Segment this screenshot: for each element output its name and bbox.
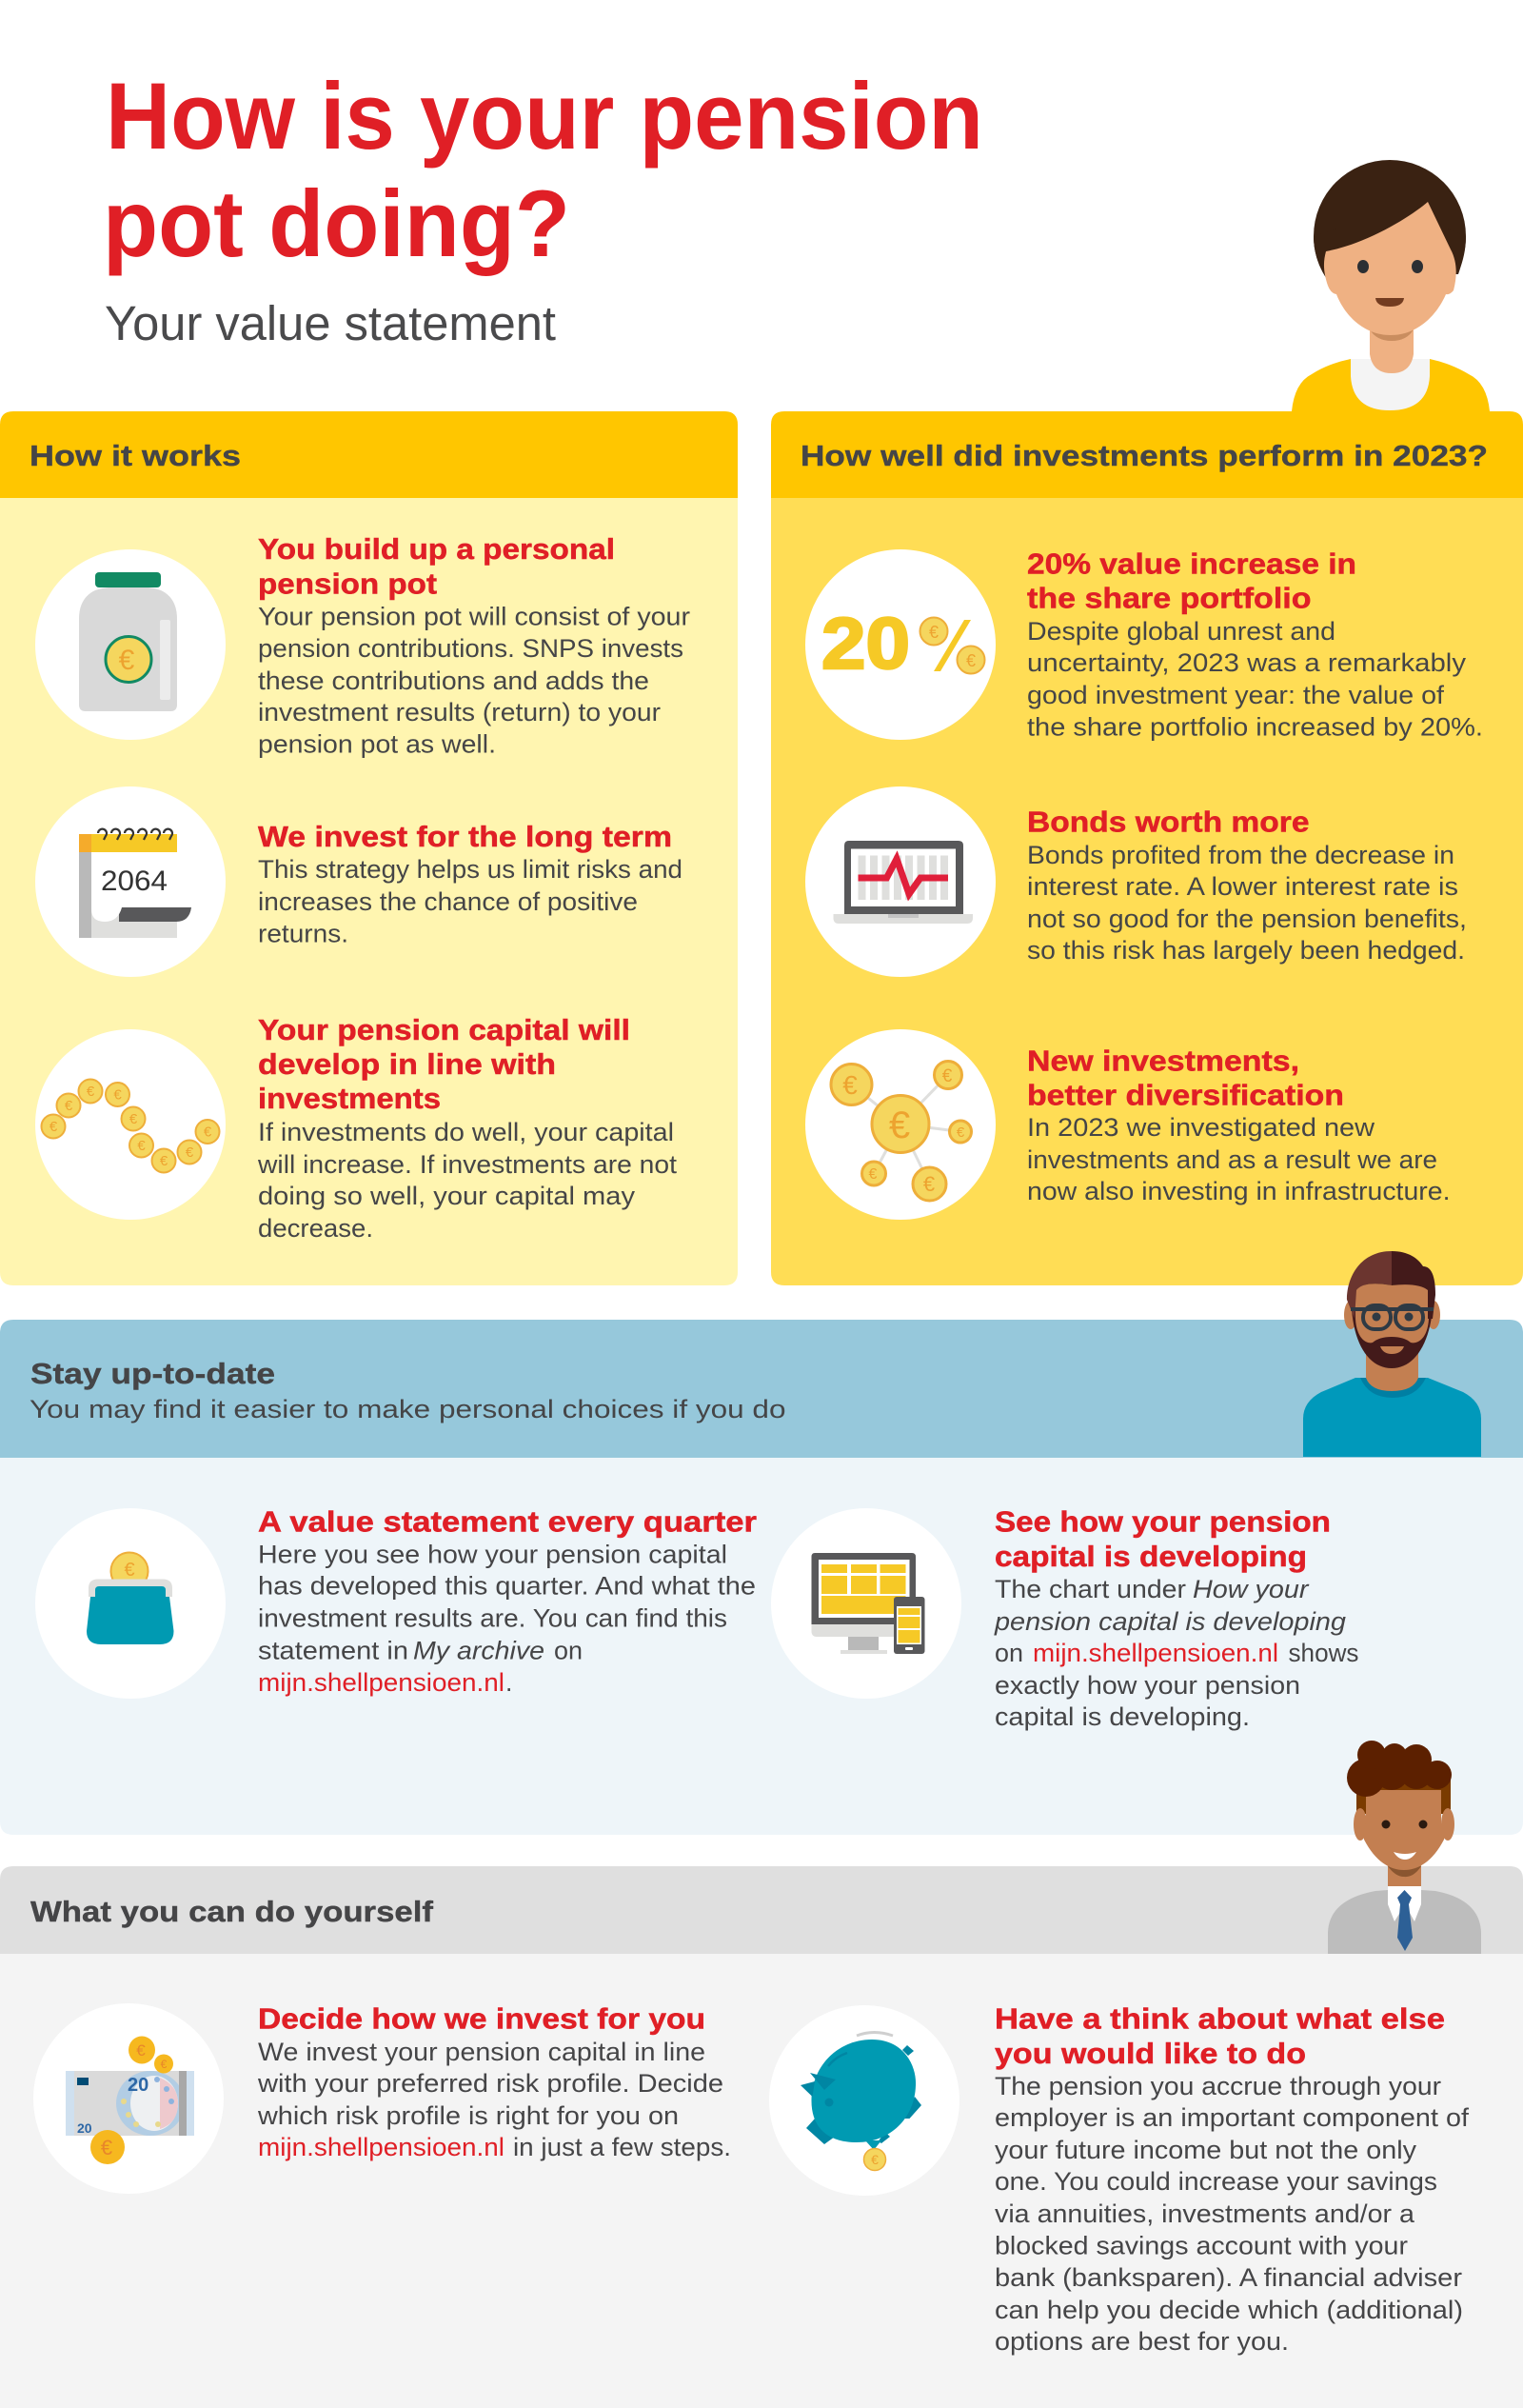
icon: banknote and coins: € xyxy=(136,2041,146,2060)
text block: value statement every quarter: statement in xyxy=(258,1636,408,1664)
panel: what you can do yourself xyxy=(0,1866,1523,2408)
text block: personal pension pot: Your pension pot will consist of your xyxy=(258,602,690,630)
icon: purse with coin: € xyxy=(124,1560,135,1581)
text block: what else to do: can help you decide which (additional) xyxy=(995,2296,1463,2324)
panel header: stay up-to-date xyxy=(0,1320,1523,1458)
text block: value statement every quarter xyxy=(258,1504,757,1697)
text block: value statement every quarter: investment results are. You can find this xyxy=(258,1603,727,1632)
text block: value statement every quarter: mijn.shellpensioen.nl xyxy=(258,1668,504,1697)
text block: bonds: Bonds worth more xyxy=(1027,806,1310,838)
text block: decide how we invest: which risk profile is right for you on xyxy=(257,2101,679,2130)
text block: personal pension pot: investment results (return) to your xyxy=(258,698,661,726)
text block: new investments xyxy=(1027,1044,1451,1205)
icon: coin network: € xyxy=(869,1166,878,1183)
text block: what else to do: bank (banksparen). A financial adviser xyxy=(995,2263,1462,2292)
icon: laptop with chart xyxy=(805,786,996,977)
text block: personal pension pot: these contributions and adds the xyxy=(258,667,649,695)
text block: personal pension pot: You build up a personal xyxy=(258,532,615,566)
panel header: what you can do yourself: What you can do yourself xyxy=(30,1895,434,1928)
icon: wave of coins: € xyxy=(87,1084,95,1100)
text block: value statement every quarter: Here you see how your pension capital xyxy=(258,1541,727,1569)
text block: new investments: investments and as a result we are xyxy=(1027,1145,1437,1174)
text block: see how your capital develops: mijn.shellpensioen.nl xyxy=(1033,1639,1278,1667)
text block: bonds: Bonds profited from the decrease in xyxy=(1027,841,1454,869)
text block: what else to do: employer is an important component of xyxy=(995,2103,1470,2132)
panel header: how it works: How it works xyxy=(30,439,241,472)
subtitle: Your value statement xyxy=(105,296,556,350)
icon: purse with coin xyxy=(35,1508,226,1699)
text block: share portfolio: uncertainty, 2023 was a remarkably xyxy=(1027,648,1467,677)
text block: see how your capital develops: How your xyxy=(1193,1575,1310,1603)
text block: long term: increases the chance of positive xyxy=(258,887,638,916)
icon: wave of coins: € xyxy=(129,1111,138,1127)
text block: long term: We invest for the long term xyxy=(258,820,672,853)
text block: see how your capital develops: capital is developing xyxy=(995,1540,1307,1573)
text block: what else to do: you would like to do xyxy=(995,2037,1306,2070)
icon: banknote and coins xyxy=(33,2003,224,2194)
panel header: investment performance: How well did investments perform in 2023? xyxy=(801,439,1488,472)
panel: stay up-to-date xyxy=(0,1320,1523,1835)
text block: value statement every quarter: A value statement every quarter xyxy=(258,1504,757,1539)
text block: decide how we invest: mijn.shellpensioen.nl xyxy=(258,2133,504,2161)
text block: new investments: better diversification xyxy=(1027,1078,1344,1112)
text block: what else to do: The pension you accrue through your xyxy=(995,2072,1441,2100)
text block: share portfolio: the share portfolio increased by 20%. xyxy=(1027,712,1483,741)
text block: what else to do: via annuities, investments and/or a xyxy=(995,2199,1414,2228)
text block: personal pension pot xyxy=(258,532,690,758)
illustration: man in grey suit xyxy=(1328,1741,1481,1954)
text block: what else to do xyxy=(995,2001,1470,2356)
icon: wave of coins: € xyxy=(113,1087,122,1103)
text block: personal pension pot: pension pot as well. xyxy=(258,729,496,758)
icon: coin network: € xyxy=(942,1066,953,1086)
text block: long term: returns. xyxy=(258,920,348,948)
icon: coin network: € xyxy=(842,1070,858,1100)
text block: value statement every quarter: My archive xyxy=(413,1636,544,1664)
text block: capital develops: Your pension capital will xyxy=(258,1013,630,1046)
text block: what else to do: Have a think about what else xyxy=(995,2001,1445,2036)
text block: capital develops: doing so well, your capital may xyxy=(258,1182,636,1210)
text block: capital develops: will increase. If investments are not xyxy=(257,1150,678,1179)
icon: wave of coins: € xyxy=(186,1144,194,1161)
icon: wave of coins: € xyxy=(49,1119,58,1135)
icon: 20 percent xyxy=(805,549,996,740)
icon: 20 percent: 20 xyxy=(821,604,910,685)
icon: coin network: € xyxy=(923,1172,935,1196)
text block: see how your capital develops xyxy=(994,1504,1359,1731)
text block: new investments: In 2023 we investigated new xyxy=(1027,1113,1375,1142)
icon: pension jar xyxy=(35,549,226,740)
icon: wave of coins: € xyxy=(65,1098,73,1114)
title xyxy=(103,63,983,276)
panel: investment performance xyxy=(771,411,1523,1285)
icon: calendar 2064 xyxy=(35,786,226,977)
text block: personal pension pot: pension pot xyxy=(258,567,437,600)
icon: 20 percent: € xyxy=(966,651,976,670)
panel header: what you can do yourself xyxy=(0,1866,1523,1954)
text block: share portfolio: 20% value increase in xyxy=(1027,547,1356,581)
illustration: man with glasses and beard xyxy=(1303,1251,1481,1457)
text block: personal pension pot: pension contributions. SNPS invests xyxy=(258,634,683,663)
text block: new investments: New investments, xyxy=(1027,1044,1299,1078)
text block: share portfolio: good investment year: the value of xyxy=(1027,681,1445,709)
text block: share portfolio: Despite global unrest and xyxy=(1027,617,1335,646)
text block: bonds: so this risk has largely been hedged. xyxy=(1027,936,1465,965)
icon: desktop and phone xyxy=(771,1508,961,1699)
panel header: stay up-to-date: Stay up-to-date xyxy=(30,1357,275,1390)
icon: piggy bank xyxy=(769,2005,959,2196)
text block: bonds: not so good for the pension benefits, xyxy=(1027,905,1467,933)
title: pot doing? xyxy=(103,170,570,276)
text block: decide how we invest: in just a few steps. xyxy=(513,2133,731,2161)
icon: piggy bank: € xyxy=(871,2152,879,2167)
text block: long term: This strategy helps us limit risks and xyxy=(258,855,682,884)
text block: decide how we invest: We invest your pension capital in line xyxy=(258,2038,705,2066)
text block: bonds xyxy=(1027,806,1467,965)
icon: wave of coins: € xyxy=(160,1153,168,1169)
text block: what else to do: blocked savings account with your xyxy=(995,2232,1408,2260)
text block: bonds: interest rate. A lower interest rate is xyxy=(1027,872,1458,901)
panel header: investment performance xyxy=(771,411,1523,498)
icon: coin network: € xyxy=(889,1104,910,1146)
text block: value statement every quarter: on xyxy=(554,1636,583,1664)
icon: calendar 2064: 2064 xyxy=(101,866,168,897)
text block: decide how we invest: with your preferred risk profile. Decide xyxy=(257,2069,723,2098)
text block: what else to do: one. You could increase your savings xyxy=(995,2167,1437,2196)
text block: see how your capital develops: See how your pension xyxy=(995,1504,1331,1539)
illustration: woman in yellow xyxy=(1292,160,1490,411)
text block: capital develops: If investments do well, your capital xyxy=(258,1118,674,1146)
text block: see how your capital develops: exactly how your pension xyxy=(995,1671,1300,1700)
text block: see how your capital develops: shows xyxy=(1289,1639,1359,1667)
text block: see how your capital develops: capital is developing. xyxy=(995,1702,1250,1731)
text block: long term xyxy=(258,820,682,948)
icon: wave of coins: € xyxy=(137,1138,146,1154)
icon: wave of coins xyxy=(35,1029,226,1220)
text block: see how your capital develops: The chart under xyxy=(995,1575,1186,1603)
panel header: stay up-to-date: You may find it easier to make personal choices if you do xyxy=(30,1395,786,1423)
panel header: how it works xyxy=(0,411,738,498)
icon: banknote and coins: € xyxy=(161,2058,168,2071)
icon: coin network: € xyxy=(957,1124,965,1141)
icon: banknote and coins: 20 xyxy=(77,2120,92,2136)
text block: see how your capital develops: on xyxy=(995,1639,1023,1667)
text block: capital develops xyxy=(257,1013,678,1243)
text block: what else to do: options are best for you. xyxy=(995,2327,1289,2356)
text block: value statement every quarter: . xyxy=(505,1668,512,1697)
title: How is your pension xyxy=(106,63,983,169)
text block: share portfolio: the share portfolio xyxy=(1027,581,1312,615)
panel: how it works xyxy=(0,411,738,1285)
icon: pension jar: € xyxy=(119,645,135,676)
text block: decide how we invest: Decide how we invest for you xyxy=(258,2001,705,2036)
text block: decide how we invest xyxy=(257,2001,731,2161)
text block: capital develops: develop in line with xyxy=(258,1047,556,1081)
text block: new investments: now also investing in infrastructure. xyxy=(1027,1177,1451,1205)
text block: capital develops: decrease. xyxy=(258,1214,373,1243)
text block: see how your capital develops: pension capital is developing xyxy=(994,1607,1346,1636)
text block: capital develops: investments xyxy=(258,1082,441,1115)
icon: banknote and coins: € xyxy=(101,2136,112,2159)
icon: wave of coins: € xyxy=(204,1124,212,1141)
icon: coin network xyxy=(805,1029,996,1220)
icon: 20 percent: € xyxy=(929,623,939,642)
icon: banknote and coins: 20 xyxy=(128,2075,148,2096)
text block: what else to do: your future income but not the only xyxy=(995,2136,1417,2164)
text block: value statement every quarter: has developed this quarter. And what the xyxy=(258,1571,756,1600)
text block: share portfolio xyxy=(1027,547,1483,741)
